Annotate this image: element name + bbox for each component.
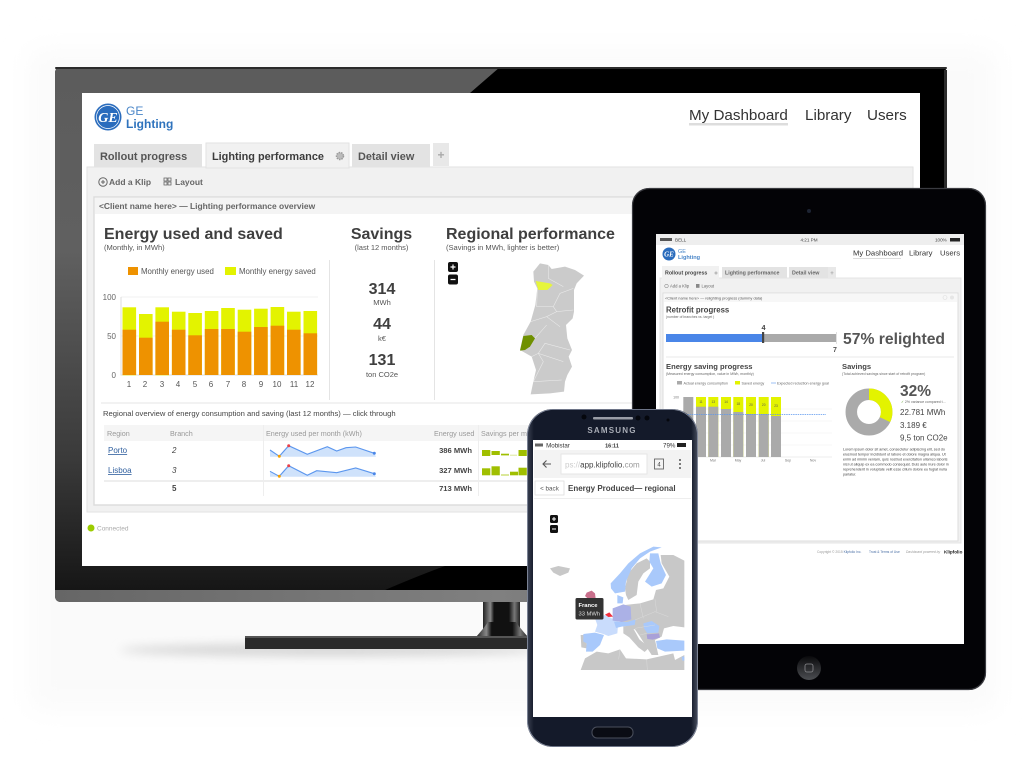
energy saving progress heading: (Measured energy consumption, value in MWh, monthly) (666, 372, 754, 376)
retrofit progress bar: 4 (761, 323, 766, 332)
navigation: My Dashboard (689, 107, 788, 124)
phone status bar: Mobistar (546, 442, 570, 450)
tablet bar chart: 18 (737, 402, 740, 406)
regional table: Region (107, 429, 130, 438)
tablet toolbar: Layout (702, 284, 715, 288)
tablet status bar: 4:21 PM (800, 238, 818, 242)
tablet bar chart: Mar (710, 458, 717, 462)
bar chart: monthly energy: 100 (103, 293, 117, 302)
tablet bar chart (673, 396, 832, 462)
retrofit progress bar (666, 323, 837, 354)
regional table: Lisboa (108, 466, 132, 475)
tablet toolbar: Add a Klip (670, 284, 690, 288)
map zoom controls (448, 262, 458, 284)
heading: regional performance: Regional performance (446, 226, 615, 243)
retrofit progress heading (666, 306, 730, 319)
map tooltip: 33 MWh (578, 612, 600, 618)
tablet bar chart: 23 (774, 404, 778, 408)
phone (527, 409, 698, 747)
phone status bar: 79% (663, 442, 676, 450)
lorem text (843, 448, 949, 476)
table title: Regional overview of energy consumption and saving (last 12 months) — click through (103, 409, 396, 418)
tablet footer: Dashboard powered by (906, 550, 940, 554)
bar chart: monthly energy: 7 (226, 380, 231, 389)
tablet bar chart: 11 (699, 400, 703, 404)
tablet tabs: Rollout progress (665, 270, 707, 276)
tablet navigation: Library (909, 248, 933, 258)
bar chart: monthly energy: 2 (143, 380, 148, 389)
savings figures: 32% (900, 383, 931, 400)
savings KPI: 314 (369, 281, 395, 298)
tablet chart legend: Expected reduction energy goal (777, 382, 829, 386)
regional table: 386 MWh (439, 446, 472, 455)
tablet tabs: Lighting performance (725, 270, 779, 276)
donut chart (851, 394, 887, 430)
tablet bar chart: 20 (749, 403, 753, 407)
savings heading (842, 362, 925, 376)
toolbar (99, 177, 203, 187)
monitor stand (120, 602, 540, 656)
tablet toolbar (665, 284, 715, 288)
phone body (527, 409, 698, 747)
tablet logo: GE (678, 249, 686, 255)
bar chart: monthly energy (103, 293, 318, 389)
bar chart legend: Monthly energy saved (239, 267, 316, 276)
regional table: 713 MWh (439, 484, 472, 493)
browser bar: ps://app.klipfolio.com (565, 460, 640, 470)
regional table: 3 (172, 466, 177, 475)
bar chart: monthly energy: 0 (112, 371, 117, 380)
heading: regional performance (446, 226, 615, 252)
tablet bar chart: May (735, 458, 742, 462)
connection status: Connected (97, 526, 129, 532)
tablet chart legend: Saved energy (742, 382, 764, 386)
navigation (689, 107, 907, 126)
regional table: Energy used per month (kWh) (266, 429, 362, 438)
regional table: Savings per month (481, 429, 541, 438)
tablet bar chart: 20 (762, 403, 766, 407)
energy saving progress heading: Energy saving progress (666, 362, 753, 371)
bar chart: monthly energy: 12 (306, 380, 315, 389)
tablet chart legend (677, 381, 829, 386)
tablet bar chart: 13 (712, 400, 715, 404)
heading: regional performance: (Savings in MWh, lighter is better) (446, 243, 560, 252)
klip card: <Client name here> — Lighting performance overview (99, 201, 316, 211)
regional table: 327 MWh (439, 466, 472, 475)
tablet tabs: Detail view (792, 270, 820, 276)
savings KPI: 131 (369, 352, 395, 369)
monitor bezel (55, 67, 947, 602)
bar chart legend (128, 267, 316, 276)
tablet footer: Klipfolio (944, 550, 963, 554)
bar chart: monthly energy: 3 (160, 380, 165, 389)
toolbar: Add a Klip (109, 177, 151, 187)
tablet navigation (853, 248, 960, 259)
tablet status bar (656, 234, 964, 245)
tabs: + (437, 148, 445, 162)
tablet status bar: BELL (675, 238, 687, 242)
tablet bar chart: Jul (761, 458, 765, 462)
bar chart: monthly energy: 5 (193, 380, 198, 389)
regional table: Porto (108, 446, 128, 455)
lorem text: eiusmod tempor incididunt ut labore et dolore magna aliqua. Ut (843, 452, 946, 456)
bar chart: monthly energy: 10 (273, 380, 282, 389)
tablet bar chart: Sep (785, 458, 791, 462)
navigation: Users (867, 107, 907, 124)
GE logo: GE (98, 111, 118, 126)
GE logo (94, 104, 173, 131)
bar chart: monthly energy: 11 (290, 380, 299, 389)
tablet status bar: 100% (935, 238, 947, 242)
tablet home button (797, 656, 821, 680)
regional table: 2 (171, 446, 177, 455)
tabs: Detail view (358, 151, 415, 163)
tablet card (663, 293, 958, 541)
energy saving progress heading (666, 362, 754, 376)
browser bar: 4 (657, 462, 661, 468)
bar chart legend: Monthly energy used (141, 267, 214, 276)
phone home button (592, 727, 633, 738)
regional table: 5 (172, 484, 177, 493)
phone status bar: 16:11 (605, 444, 619, 450)
tablet body (632, 188, 986, 690)
tablet logo: GE (664, 250, 674, 258)
map tooltip: France (578, 603, 598, 609)
tablet card: <Client name here> — relighting progress (dummy data) (665, 296, 763, 300)
regional table: Branch (170, 429, 193, 438)
tablet bar chart: Nov (810, 458, 816, 462)
savings figures (900, 383, 948, 442)
lorem text: reprehenderit in voluptate velit esse cillum dolore eu fugiat nulla (843, 468, 948, 472)
savings KPI: Savings (351, 226, 412, 243)
tablet tabs: + (830, 271, 834, 277)
tablet bar chart: 100 (673, 396, 679, 400)
savings figures: 22.781 MWh (900, 408, 945, 417)
tablet (632, 188, 986, 690)
heading: energy used and saved: Energy used and saved (104, 226, 283, 243)
savings KPI: MWh (373, 298, 391, 307)
tabs: Lighting performance (212, 151, 324, 163)
bar chart: monthly energy: 50 (107, 332, 117, 341)
map: Europe (550, 547, 684, 670)
regional table: Energy used (434, 429, 474, 438)
heading: energy used and saved: (Monthly, in MWh) (104, 243, 165, 252)
tablet navigation: My Dashboard (853, 248, 903, 258)
retrofit progress heading: Retrofit progress (666, 306, 730, 314)
bar chart: monthly energy: 9 (259, 380, 264, 389)
lorem text: nisi ut aliquip ex ea commodo consequat. Duis aute irure dolor in (843, 462, 949, 466)
connection status (88, 524, 129, 532)
GE logo: GE (126, 104, 143, 118)
savings mini bars (482, 450, 527, 476)
tablet screen (656, 234, 964, 644)
tablet footer: Trust & Terms of Use (869, 550, 900, 554)
phone status bar (535, 442, 686, 450)
sparkline: Lisboa (270, 464, 376, 478)
navigation: Library (805, 107, 852, 124)
bar chart: monthly energy: 6 (209, 380, 214, 389)
savings figures: ✓ 2% variance compared t... (901, 400, 946, 404)
map: Portugal (520, 263, 584, 394)
savings heading: (Total achieved savings since start of retrofit program) (842, 372, 925, 376)
sparkline: Porto (270, 444, 376, 458)
tablet logo (662, 248, 701, 261)
retrofit progress heading: (number of branches vs. target ) (666, 315, 714, 319)
browser bar (534, 450, 691, 478)
relighted KPI: 57% relighted (843, 331, 945, 348)
phone page header: < back (540, 486, 560, 492)
lorem text: pariatur. (843, 472, 856, 476)
bar chart: monthly energy: 1 (127, 380, 132, 389)
regional table (104, 425, 907, 496)
tablet footer (817, 550, 963, 554)
tablet chart legend: Actual energy consumption (684, 382, 728, 386)
savings KPI: k€ (378, 334, 387, 343)
savings KPI: 44 (373, 316, 391, 333)
dashboard panel (87, 167, 913, 512)
phone page header: Energy Produced— regional (568, 484, 676, 493)
tablet bar chart: 14 (724, 400, 728, 404)
bar chart: monthly energy: 8 (242, 380, 247, 389)
lorem text: enim ad minim veniam, quis nostrud exercitation ullamco laboris (843, 458, 948, 462)
phone screen (533, 440, 692, 717)
savings figures: 9,5 ton CO2e (900, 434, 948, 442)
tablet navigation: Users (940, 248, 960, 258)
savings heading: Savings (842, 362, 871, 371)
heading: energy used and saved (104, 226, 283, 252)
tablet panel (660, 278, 961, 543)
monitor (55, 67, 947, 656)
map tooltip (576, 598, 604, 620)
lorem text: Lorem ipsum dolor sit amet, consectetur adipiscing elit, sed do (843, 448, 945, 452)
bar chart: monthly energy: 4 (176, 380, 181, 389)
phone page header (534, 481, 691, 499)
klip card (94, 197, 907, 505)
tablet footer: Copyright © 2015 Klipfolio Inc. (817, 550, 861, 554)
monitor screen (82, 93, 920, 566)
tablet tabs (662, 266, 836, 279)
tabs: Rollout progress (100, 151, 187, 163)
savings KPI: (last 12 months) (355, 243, 409, 252)
phone body: SAMSUNG (587, 426, 637, 435)
toolbar: Layout (175, 177, 203, 187)
tabs (94, 143, 449, 168)
retrofit progress bar: 7 (833, 347, 837, 354)
GE logo: Lighting (126, 117, 173, 131)
panel dividers (101, 260, 907, 403)
savings figures: 3.189 € (900, 421, 927, 430)
phone map zoom controls (550, 515, 558, 533)
tablet logo: Lighting (678, 255, 701, 261)
savings KPI (351, 226, 412, 379)
savings KPI: ton CO2e (366, 370, 398, 379)
